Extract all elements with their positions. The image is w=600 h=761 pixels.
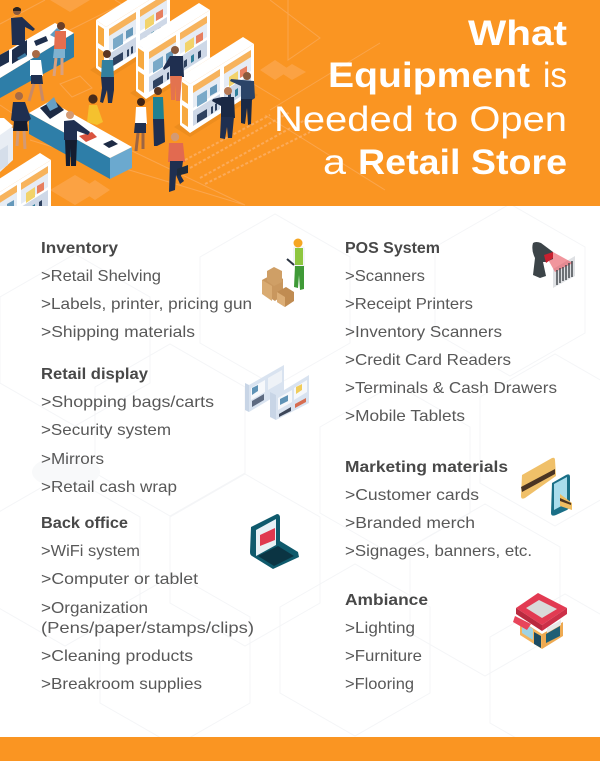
shelf unit bottom left: [0, 153, 51, 206]
section: POS System: >Credit Card Readers: [345, 352, 511, 369]
icon: credit card and phone: [521, 458, 572, 516]
section: Ambiance: [345, 592, 428, 693]
faint hexagon network background: [0, 204, 600, 761]
shelf unit front: [174, 37, 258, 137]
section: Inventory: >Labels, printer, pricing gun: [41, 296, 252, 313]
section: Ambiance: Ambiance: [345, 592, 428, 609]
header diamond accents: [50, 0, 306, 205]
person: navy man at shelf: [212, 87, 235, 139]
shelf unit back: [90, 0, 174, 80]
icon: storefront: [513, 593, 567, 649]
header network lines: [0, 0, 385, 205]
title: Equipment: [328, 56, 530, 95]
section: Back office: (Pens/paper/stamps/clips): [41, 620, 254, 637]
icon: worker with boxes: [262, 238, 305, 307]
icon: barcode scanner: [532, 242, 575, 288]
person: navy top coral pants: [163, 46, 184, 101]
person: white shirt woman: [29, 50, 43, 101]
section: POS System: [345, 240, 557, 425]
person: teal tank woman: [100, 50, 114, 103]
title: Retail Store: [358, 143, 567, 182]
section: Inventory: [41, 240, 252, 341]
shelf unit left: [0, 118, 13, 172]
section: Back office: >Computer or tablet: [41, 571, 199, 588]
person: teal shirt man: [153, 87, 165, 146]
section: Ambiance: >Furniture: [345, 648, 422, 665]
section: Inventory: >Retail Shelving: [41, 268, 161, 285]
section: Retail display: >Shopping bags/carts: [41, 394, 214, 411]
section: Retail display: >Retail cash wrap: [41, 479, 177, 496]
section: Retail display: Retail display: [41, 366, 148, 383]
section: Marketing materials: >Branded merch: [345, 515, 475, 532]
person: coral sweater with briefcase: [168, 133, 188, 192]
person: white shirt woman centre: [134, 98, 147, 151]
section: Back office: >Cleaning products: [41, 648, 193, 665]
icon: display shelves: [245, 365, 309, 420]
section: Marketing materials: [345, 459, 532, 560]
section: Ambiance: >Flooring: [345, 676, 414, 693]
title: [274, 14, 567, 182]
title: Needed to Open: [274, 100, 567, 139]
section: POS System: >Mobile Tablets: [345, 408, 465, 425]
section: Inventory: >Shipping materials: [41, 324, 195, 341]
section: Inventory: Inventory: [41, 240, 118, 257]
section: Back office: >Breakroom supplies: [41, 676, 202, 693]
section: POS System: >Terminals & Cash Drawers: [345, 380, 557, 397]
section: Marketing materials: >Customer cards: [345, 487, 479, 504]
footer band: [0, 737, 600, 761]
section: POS System: POS System: [345, 240, 440, 257]
section: Marketing materials: >Signages, banners, etc.: [345, 543, 532, 560]
shelf unit middle: [130, 3, 214, 103]
person: woman in coral top: [53, 22, 66, 76]
section: Retail display: >Mirrors: [41, 451, 104, 468]
section: POS System: >Inventory Scanners: [345, 324, 502, 341]
title: What: [468, 14, 567, 53]
person: navy man behind counter: [11, 7, 35, 45]
header artwork clipped to band: [0, 0, 386, 206]
person: clerk at counter: [64, 111, 90, 166]
section: Back office: Back office: [41, 515, 128, 532]
title: a: [323, 143, 347, 182]
icon: laptop: [250, 514, 299, 569]
section: Retail display: [41, 366, 214, 496]
section: Marketing materials: Marketing materials: [345, 459, 508, 476]
section: Back office: [41, 515, 254, 693]
section: Ambiance: >Lighting: [345, 620, 415, 637]
section: Back office: >Organization: [41, 600, 148, 617]
monitors: [0, 28, 61, 68]
section: POS System: >Scanners: [345, 268, 425, 285]
orange header band: [0, 0, 600, 206]
person: yellow shirt: [87, 94, 103, 125]
section: POS System: >Receipt Printers: [345, 296, 473, 313]
section: Retail display: >Security system: [41, 422, 171, 439]
section: Back office: >WiFi system: [41, 543, 140, 560]
counter front: [29, 97, 132, 179]
header data dots pattern: [185, 112, 310, 184]
counter top left: [0, 23, 74, 98]
person: navy woman left: [11, 92, 31, 149]
title: is: [543, 56, 567, 95]
person: bearded man at shelf: [230, 72, 255, 125]
